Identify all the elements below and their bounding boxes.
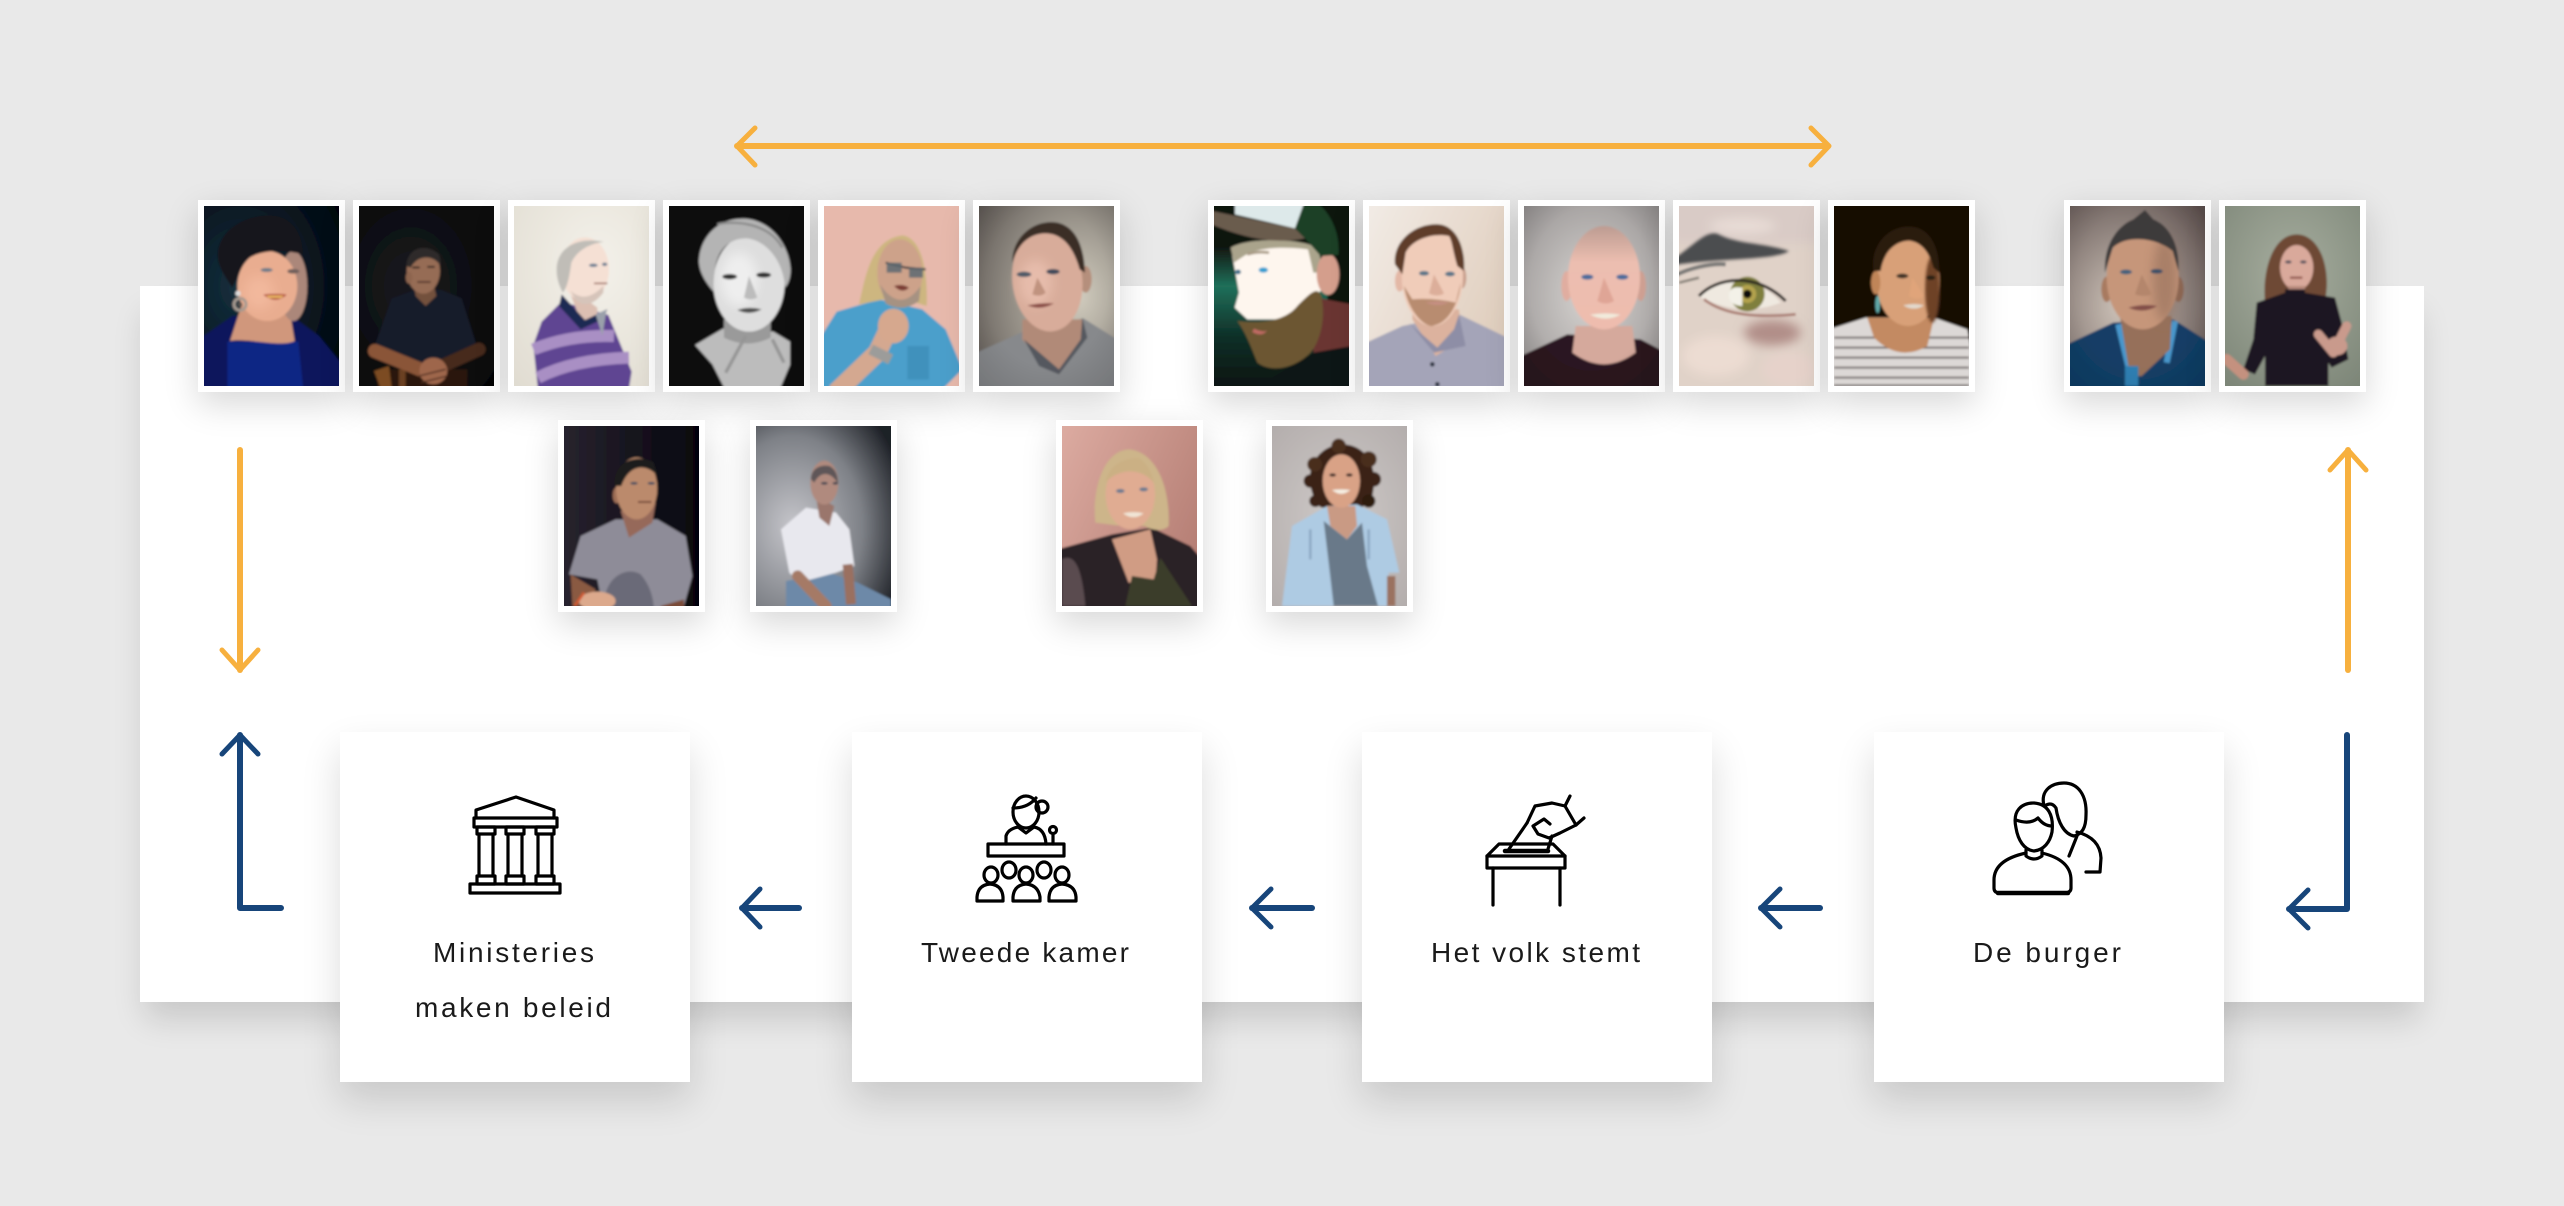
box: Ministeries maken beleid <box>340 732 690 1082</box>
label: De burger: De burger <box>1973 937 2121 968</box>
portrait 16: blonde woman in leather jacket on pink background <box>1056 420 1203 612</box>
portrait 8: man with stubble in grey polo <box>1363 200 1510 392</box>
portrait 5: man with blond hair, glasses and blue shirt <box>818 200 965 392</box>
label: Ministeries maken beleid: maken beleid <box>415 992 611 1023</box>
portrait 9: bald smiling man in dark red sweater <box>1518 200 1665 392</box>
portrait 10: close-up of a green eye <box>1673 200 1820 392</box>
arrow: blue left to ministeries <box>742 889 799 927</box>
label: Tweede kamer: Tweede kamer <box>921 937 1129 968</box>
panel: white background panel <box>140 286 2424 1002</box>
portrait 13: woman in dark turtleneck gesturing <box>2219 200 2366 392</box>
box: Het volk stemt <box>1362 732 1712 1082</box>
label: Ministeries maken beleid: Ministeries <box>433 937 594 968</box>
portrait 14: man in grey shirt sitting on dark background <box>558 420 705 612</box>
icon: ministry building <box>470 797 560 893</box>
arrow: orange up right <box>2330 450 2366 670</box>
portrait 4: black and white portrait of a woman <box>663 200 810 392</box>
arrow: blue left to tweede kamer <box>1252 889 1312 927</box>
portrait 7: bearded man in profile wearing a cap <box>1208 200 1355 392</box>
label: Het volk stemt: Het volk stemt <box>1431 937 1640 968</box>
icon: two citizens <box>1994 783 2101 893</box>
arrow: blue left to het volk <box>1761 889 1820 927</box>
portrait 1: woman with dark hair and blue cardigan <box>198 200 345 392</box>
portrait 3: grey-haired man in purple striped polo <box>508 200 655 392</box>
portrait 12: man with spiky hair in blue polo <box>2064 200 2211 392</box>
portrait 15: man in white shirt sitting against grey gradient <box>750 420 897 612</box>
box: Tweede kamer <box>852 732 1202 1082</box>
portrait 2: man in dark shirt with folded hands <box>353 200 500 392</box>
portrait 11: young woman with striped shirt on dark background <box>1828 200 1975 392</box>
arrow: blue from right down to de burger <box>2289 735 2347 928</box>
label: Ministeries maken beleid <box>415 937 611 1023</box>
icon: speaker and audience <box>977 796 1076 901</box>
portrait 6: man in grey shirt against beige background <box>973 200 1120 392</box>
portrait 17: smiling woman with curly hair and denim jacket <box>1266 420 1413 612</box>
arrow: orange double-headed top <box>737 128 1829 165</box>
arrow: orange down left <box>222 450 258 670</box>
arrow: blue up left <box>222 735 281 908</box>
box: De burger <box>1874 732 2224 1082</box>
icon: hand casting a ballot <box>1487 796 1584 905</box>
